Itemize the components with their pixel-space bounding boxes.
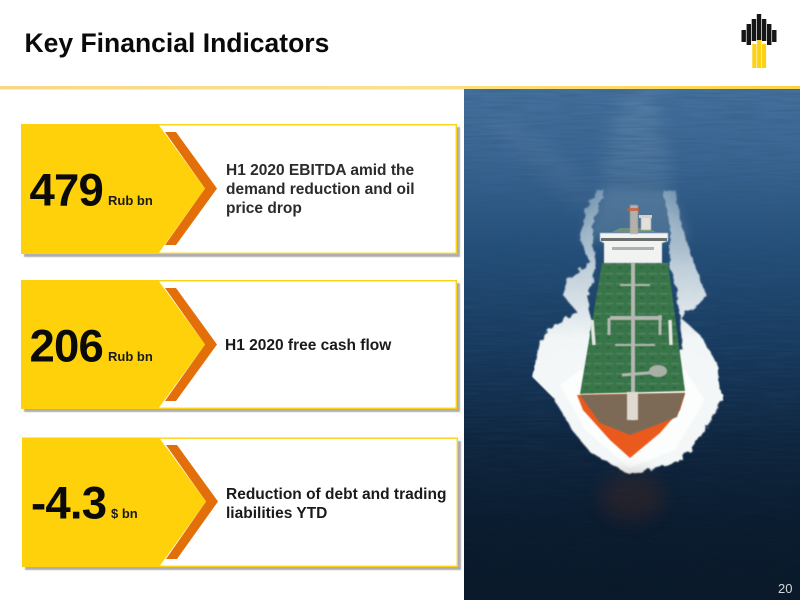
header rule [0, 86, 800, 90]
card 3 panel [23, 438, 461, 570]
bow reflection [600, 473, 664, 521]
title: Key Financial Indicators [24, 28, 329, 58]
card 1 description: price drop [226, 200, 302, 217]
card 2 [21, 280, 460, 412]
distant wake haze [602, 94, 670, 190]
wake foam right [663, 190, 722, 400]
wake foam left [533, 190, 604, 397]
card 1 description: H1 2020 EBITDA amid the [226, 162, 414, 179]
card 2 unit: Rub bn [108, 349, 153, 364]
card 3 value: -4.3 [31, 478, 106, 528]
card 1 panel [22, 125, 460, 257]
ship superstructure [600, 233, 668, 263]
card 3 unit: $ bn [111, 506, 138, 521]
green cargo deck [580, 263, 685, 394]
card 2 orange chevron [165, 288, 217, 401]
card 1 unit: Rub bn [108, 193, 153, 208]
card 1 yellow arrow [21, 124, 205, 254]
page number: 20 [778, 581, 792, 596]
card 3 description: liabilities YTD [226, 505, 327, 522]
card 3 description: Reduction of debt and trading [226, 486, 446, 503]
card 3 yellow arrow [22, 438, 206, 567]
bow deck [580, 393, 685, 435]
card 2 yellow arrow [21, 280, 205, 409]
card 1 [21, 124, 460, 257]
card 2 panel [22, 281, 460, 412]
card 2 description: H1 2020 free cash flow [225, 337, 392, 354]
near wake [582, 190, 688, 240]
funnel [641, 216, 651, 230]
card 3 orange chevron [166, 445, 218, 559]
hull [577, 393, 685, 458]
card 1 value: 479 [30, 164, 103, 216]
water ripples [464, 89, 800, 194]
card 2 value: 206 [30, 320, 103, 372]
card 3 [22, 438, 461, 570]
photo: tanker at sea [464, 89, 800, 600]
deck piping [592, 263, 671, 420]
mast [630, 205, 638, 234]
logo [742, 14, 776, 68]
bow wave foam [533, 350, 722, 475]
card 1 orange chevron [165, 132, 217, 245]
card 1 description: demand reduction and oil [226, 181, 415, 198]
